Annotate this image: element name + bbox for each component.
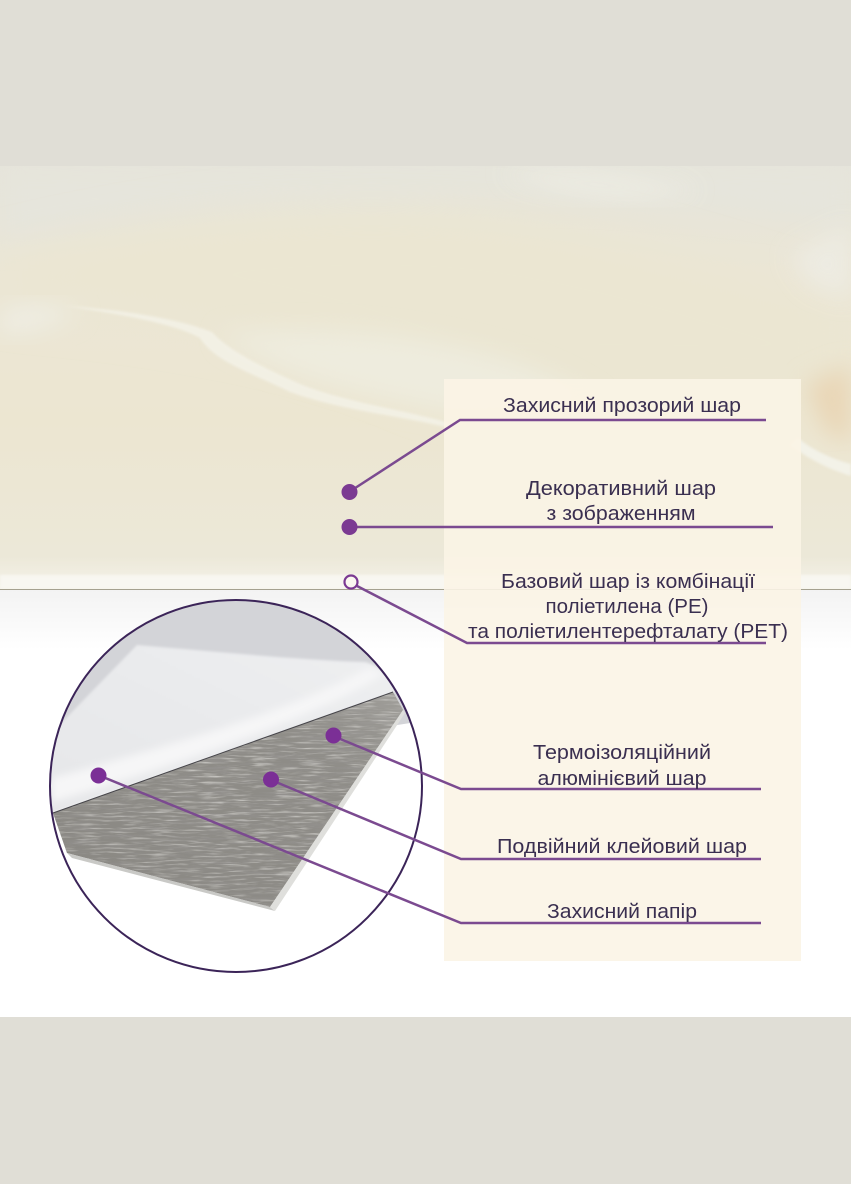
callout: Захисний папір: Захисний папір bbox=[547, 901, 697, 923]
callout: Подвійний клейовий шар: Подвійний клейовий шар bbox=[497, 836, 747, 858]
panel: labels background bbox=[444, 379, 801, 961]
white fade under the photo bbox=[0, 590, 851, 650]
callout: Базовий шар bbox=[344, 571, 788, 643]
circle outline bbox=[50, 600, 422, 972]
callout: Декоративний шар: Декоративний шар bbox=[526, 478, 716, 500]
callout: Базовий шар: та поліетилентерефталату (PET) bbox=[468, 621, 788, 643]
callout: Декоративний шар bbox=[342, 478, 773, 535]
marble photo band bbox=[0, 166, 851, 590]
circular detail inset bbox=[40, 590, 430, 972]
callout: Термоізоляційний алюмінієвий шар: Термоізоляційний bbox=[533, 742, 711, 764]
callout: Термоізоляційний алюмінієвий шар bbox=[326, 728, 761, 790]
callout: Базовий шар: поліетилена (PE) bbox=[546, 596, 708, 618]
callout: Захисний прозорий шар: Захисний прозорий шар bbox=[503, 395, 741, 417]
white product area bbox=[0, 590, 851, 1017]
callout: Декоративний шар: з зображенням bbox=[546, 503, 696, 525]
callout: Захисний папір bbox=[90, 768, 761, 923]
paper highlight bbox=[52, 676, 366, 800]
foil edge bbox=[67, 853, 275, 911]
grey backing surface bbox=[62, 601, 410, 725]
callout: Базовий шар: Базовий шар із комбінації bbox=[501, 571, 755, 593]
callout: Термоізоляційний алюмінієвий шар: алюмінієвий шар bbox=[538, 768, 706, 790]
peeled protective paper bbox=[40, 645, 396, 818]
foil adhesive surface bbox=[53, 692, 403, 907]
callout: Захисний прозорий шар bbox=[342, 395, 766, 500]
callout: Подвійний клейовий шар bbox=[263, 772, 761, 859]
